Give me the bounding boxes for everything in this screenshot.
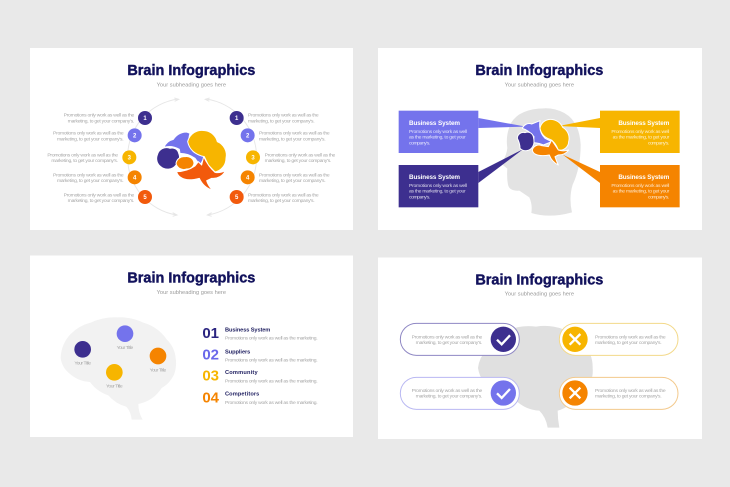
list item 04 (202, 389, 318, 406)
right text blocks: Promotions only work as well as the (259, 172, 330, 178)
box: periwinkle (399, 111, 526, 153)
left text blocks: marketing, to get your company's. (57, 178, 124, 184)
subheading: Your subheading goes here (505, 82, 574, 88)
title: Brain Infographics (127, 63, 255, 79)
left text blocks (47, 113, 135, 204)
pill: indigo check (400, 323, 519, 355)
number circles right: 5 (235, 195, 239, 201)
list item 03: Community (225, 370, 259, 376)
number circles right (230, 111, 260, 204)
list item 01: Business System (225, 327, 270, 333)
box: orange: Business System (618, 174, 670, 181)
left text blocks: Promotions only work as well as the (53, 172, 124, 178)
list item 01: Promotions only work as well as the marketing. (225, 336, 318, 342)
list item 02: Suppliers (225, 349, 250, 355)
pill: yellow cross: marketing, to get your company's. (595, 340, 662, 346)
pill: periwinkle check: Promotions only work as well as the (412, 388, 483, 394)
list item 03: Promotions only work as well as the marketing. (225, 378, 318, 384)
left text blocks: Promotions only work as well as the (53, 131, 124, 137)
marker: orange: Your Title (150, 367, 167, 373)
icon: grey brain (61, 317, 176, 420)
pill: indigo check: Promotions only work as well as the (412, 334, 483, 340)
panel: head with four boxes (378, 48, 702, 230)
box: indigo: as the marketing, to get your (409, 189, 466, 195)
number circles left (122, 111, 152, 204)
right text blocks: Promotions only work as well as the (259, 131, 330, 137)
left text blocks: marketing, to get your company's. (68, 198, 134, 204)
icon: grey brain (478, 326, 593, 428)
subheading: Your subheading goes here (157, 82, 226, 88)
marker: yellow (106, 364, 123, 390)
pill: periwinkle check (400, 377, 519, 409)
box: periwinkle: as the marketing, to get your (409, 135, 466, 141)
panel: brain with numbered list (30, 256, 353, 437)
right text blocks: Promotions only work as well as the (248, 113, 319, 119)
number circles right: 4 (246, 175, 250, 181)
left text blocks: marketing, to get your company's. (68, 118, 134, 124)
box: yellow: Business System (618, 120, 670, 127)
box: periwinkle: company's. (409, 140, 430, 146)
list item 02 (202, 346, 318, 363)
box: orange (563, 155, 680, 207)
marker: orange (150, 348, 167, 373)
right text blocks: marketing, to get your company's. (248, 198, 315, 204)
right text blocks: Promotions only work as well as the (265, 152, 336, 158)
number circles left: 5 (143, 195, 147, 201)
number circles right: 1 (235, 116, 239, 122)
title: Brain Infographics (127, 271, 255, 287)
marker: periwinkle: Your Title (117, 345, 134, 351)
icon: coloured brain in head (517, 119, 569, 165)
box: indigo: Promotions only work as well (409, 183, 467, 189)
right text blocks: marketing, to get your company's. (265, 158, 331, 164)
marker: indigo (74, 341, 91, 367)
list item 03 (202, 367, 318, 384)
box: indigo: company's. (409, 194, 430, 200)
left text blocks: marketing, to get your company's. (51, 158, 118, 164)
right text blocks: marketing, to get your company's. (259, 178, 326, 184)
pill: yellow cross (559, 323, 678, 355)
list item 04: Competitors (225, 392, 259, 398)
number circles left: 2 (133, 133, 137, 139)
number circles left: 3 (128, 155, 132, 161)
list item 02: Promotions only work as well as the marketing. (225, 357, 318, 363)
pill: indigo check: marketing, to get your company's. (416, 340, 482, 346)
box: orange: company's. (648, 194, 669, 200)
right text blocks: Promotions only work as well as the (248, 192, 319, 198)
subheading: Your subheading goes here (505, 292, 574, 298)
right text blocks: marketing, to get your company's. (259, 136, 326, 142)
pill: periwinkle check: marketing, to get your company's. (416, 394, 482, 400)
box: yellow: company's. (648, 140, 669, 146)
list item 02: 02 (202, 346, 219, 363)
box: periwinkle: Promotions only work as well (409, 129, 467, 135)
box: orange: as the marketing, to get your (613, 189, 670, 195)
icon: head silhouette (503, 108, 581, 216)
pill: orange cross: marketing, to get your company's. (595, 394, 662, 400)
right text blocks: marketing, to get your company's. (248, 118, 315, 124)
box: yellow: as the marketing, to get your (613, 135, 670, 141)
title: Brain Infographics (475, 272, 603, 288)
left text blocks: marketing, to get your company's. (57, 136, 124, 142)
icon: coloured brain (157, 130, 226, 190)
number circles right: 3 (251, 155, 255, 161)
pill: orange cross: Promotions only work as well as the (595, 388, 666, 394)
number circles right: 2 (246, 133, 250, 139)
box: orange: Promotions only work as well (611, 183, 669, 189)
left text blocks: Promotions only work as well as the (47, 152, 118, 158)
list item 04: 04 (202, 389, 220, 406)
title: Brain Infographics (475, 63, 603, 79)
list item 04: Promotions only work as well as the marketing. (225, 400, 318, 406)
number circles left: 1 (143, 116, 147, 122)
marker: indigo: Your Title (74, 361, 91, 367)
box: yellow (559, 111, 680, 153)
arc arrows (128, 98, 257, 216)
pill: yellow cross: Promotions only work as well as the (595, 334, 666, 340)
pill: orange cross (559, 377, 678, 409)
number circles left: 4 (133, 175, 137, 181)
box: indigo: Business System (409, 174, 460, 181)
panel: radial brain list (30, 48, 353, 230)
right text blocks (248, 113, 336, 204)
marker: periwinkle (117, 325, 134, 351)
box: yellow: Promotions only work as well (611, 129, 669, 135)
list item 01 (202, 325, 318, 342)
list item 01: 01 (202, 325, 219, 342)
left text blocks: Promotions only work as well as the (64, 192, 135, 198)
list item 03: 03 (202, 367, 219, 384)
panel: brain with check and cross pills (378, 258, 702, 439)
marker: yellow: Your Title (106, 384, 123, 390)
box: indigo (399, 149, 523, 207)
box: periwinkle: Business System (409, 120, 460, 127)
subheading: Your subheading goes here (157, 290, 226, 296)
left text blocks: Promotions only work as well as the (64, 113, 135, 119)
